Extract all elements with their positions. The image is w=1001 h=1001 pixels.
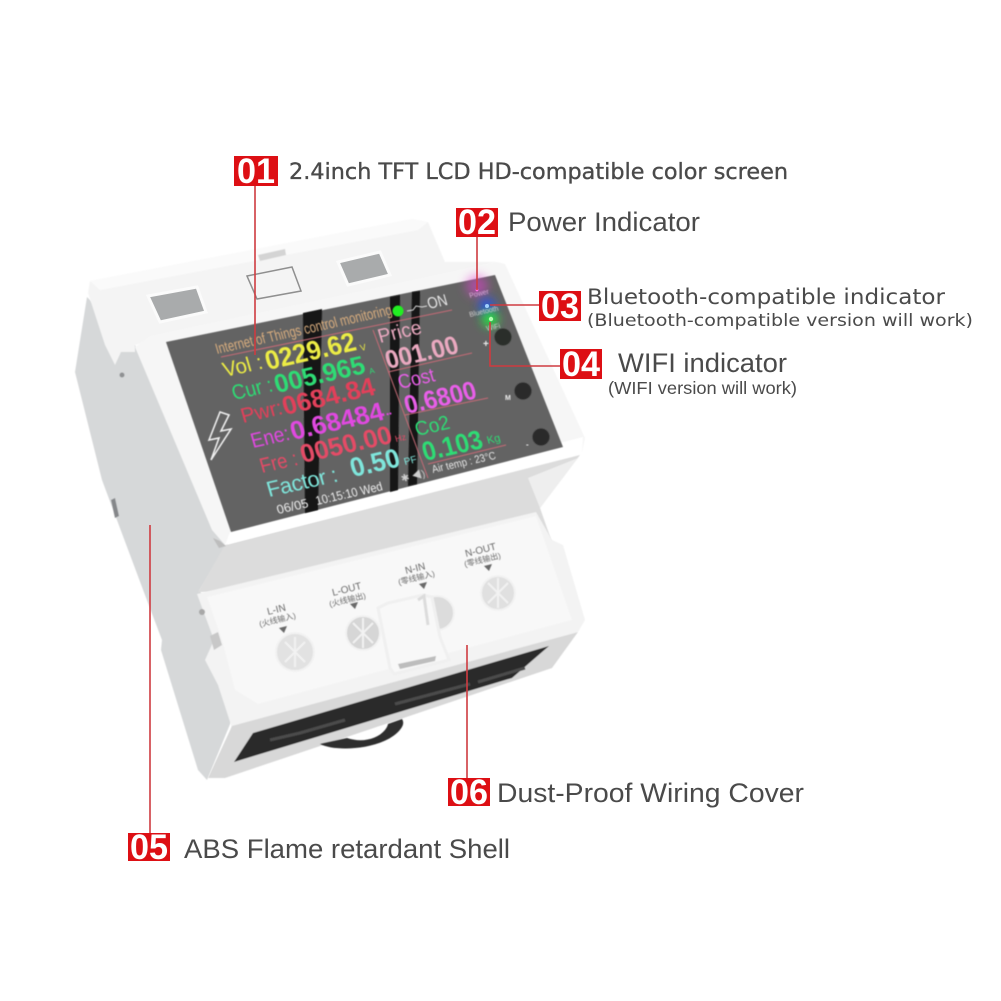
co2: 0.103 [418, 425, 486, 467]
callout 03 [539, 285, 973, 331]
switch glyph [407, 306, 427, 311]
terminal cover panel [197, 512, 585, 728]
power: Pwr: [238, 396, 285, 428]
lcd screen [166, 275, 563, 532]
indicator leds: Bluetooth [469, 306, 500, 319]
co2 [412, 412, 502, 467]
top face [88, 219, 498, 365]
frequency: Hz [394, 432, 408, 444]
energy [248, 396, 393, 453]
callout 06: Dust-Proof Wiring Cover [497, 778, 804, 808]
n-out label: N-OUT [464, 542, 497, 560]
buttons [483, 328, 550, 449]
n-out label [463, 542, 502, 571]
callout 06 [448, 773, 804, 812]
n-out label: (零线输出) [463, 550, 502, 569]
buttons: - [526, 440, 529, 449]
wiring cover flange and slot [208, 632, 578, 778]
buttons: M [505, 395, 511, 402]
indicator leds: WiFi [486, 323, 502, 333]
cost: Cost [395, 364, 438, 394]
callout 01: 01 [237, 152, 275, 191]
callout 05: ABS Flame retardant Shell [184, 834, 510, 864]
n-in label [397, 561, 436, 589]
date and time [275, 479, 384, 517]
current: A [368, 366, 376, 376]
l-in label: L-IN [266, 603, 287, 618]
top left window [148, 287, 206, 322]
power: 0684.84 [278, 371, 379, 421]
screen divider lines [221, 310, 506, 478]
leader line 03 [490, 304, 539, 306]
l-in label [258, 603, 297, 633]
title text: Internet of Things control monitoring [213, 302, 394, 358]
frequency [257, 420, 408, 478]
icon: bluetooth and speaker: ✱ ◀) [399, 468, 427, 485]
screen readouts [213, 292, 502, 517]
green status dot [392, 306, 404, 316]
co2: Kg [485, 432, 502, 447]
callout 04: 04 [562, 345, 601, 384]
terminal labels [258, 542, 502, 633]
buttons: + [483, 339, 489, 350]
top outlined rectangle [247, 267, 301, 299]
frequency: 0050.00 [296, 420, 395, 469]
indicator leds: Power [469, 289, 491, 300]
l-out label: (火线输出) [328, 590, 367, 609]
callout 04: (WIFI version will work) [608, 378, 797, 398]
callout 01 [234, 152, 788, 191]
callout 02: Power Indicator [508, 207, 700, 237]
price: 001.00 [381, 330, 462, 375]
current: 005.965 [270, 350, 368, 399]
factor: 0.50 [346, 443, 403, 483]
price: Price [375, 317, 424, 348]
under-bezel band [198, 455, 580, 592]
device: din-rail meter body [75, 219, 585, 780]
frequency: Fre : [257, 447, 300, 478]
energy: 0.68484 [286, 396, 388, 446]
date and time: 06/05 [275, 496, 310, 517]
callout 03: (Bluetooth-compatible version will work) [587, 311, 973, 331]
co2: Co2 [412, 412, 453, 441]
terminal screws [276, 576, 515, 671]
callout 02 [456, 203, 700, 242]
top right window [338, 252, 390, 285]
leader line 01 [254, 186, 256, 355]
left side shell [75, 297, 240, 780]
leader line 04 [490, 322, 560, 366]
air temperature: Air temp : 23°C [430, 450, 497, 476]
icon: lightning bolt [209, 412, 231, 460]
l-in label: (火线输入) [258, 610, 297, 629]
callout 05 [128, 828, 510, 867]
voltage [220, 327, 367, 382]
date and time: 10:15:10 Wed [314, 479, 384, 508]
screen bezel [135, 262, 585, 548]
callout 01: 2.4inch TFT LCD HD-compatible color screen [289, 160, 788, 185]
callout 03: 03 [541, 287, 579, 326]
energy: Ene: [248, 422, 292, 453]
factor: PF [403, 455, 418, 468]
current: Cur : [229, 374, 275, 405]
callout 04: WIFI indicator [618, 348, 787, 378]
terminal cover latch [378, 595, 449, 674]
power [238, 371, 379, 428]
current [229, 350, 376, 405]
din clip hook [320, 719, 403, 748]
l-out label [328, 581, 367, 609]
voltage: Vol : [220, 351, 265, 382]
callout 03: Bluetooth-compatible indicator [587, 285, 945, 309]
n-in label: (零线输入) [397, 568, 436, 587]
callout 02: 02 [458, 203, 496, 242]
leader line 06 [466, 645, 468, 778]
voltage: 0229.62 [261, 327, 359, 376]
callout 05: 05 [130, 828, 168, 867]
on label: ON [425, 292, 450, 313]
indicator leds [466, 275, 502, 333]
factor: Factor : [263, 462, 341, 502]
energy: •• [385, 409, 393, 419]
l-out label: L-OUT [331, 581, 363, 599]
callout 04 [560, 345, 797, 398]
leader line 02 [476, 237, 478, 290]
n-in label: N-IN [404, 561, 427, 577]
voltage: V [359, 342, 367, 353]
factor [263, 443, 418, 502]
cost: 0.6800 [400, 375, 480, 420]
screen dark bands [303, 291, 420, 513]
leader line 05 [149, 525, 151, 833]
callout 06: 06 [450, 773, 488, 812]
